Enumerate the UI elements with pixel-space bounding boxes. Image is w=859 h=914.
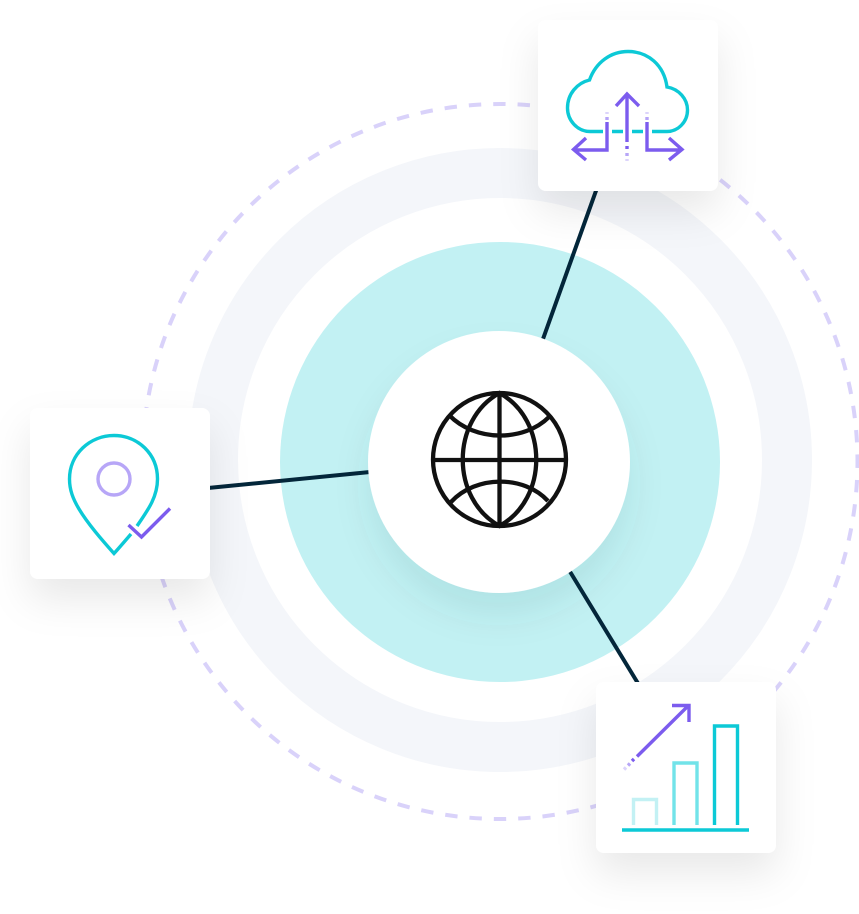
panel: chart card xyxy=(596,682,776,853)
dashed outer orbit xyxy=(142,104,858,819)
central white hub xyxy=(368,331,630,593)
connector: cloud card xyxy=(543,188,597,339)
teal disc xyxy=(280,242,720,682)
icon: globe xyxy=(433,393,566,526)
icon: rising bar chart xyxy=(622,705,749,830)
icon: map pin with check xyxy=(70,436,170,554)
connector: location card xyxy=(208,472,370,488)
panel: location card xyxy=(30,408,210,579)
icon: cloud with arrows xyxy=(568,52,688,161)
panel: cloud card xyxy=(538,20,718,191)
connector: chart card xyxy=(569,570,639,685)
gray ring xyxy=(213,173,787,747)
